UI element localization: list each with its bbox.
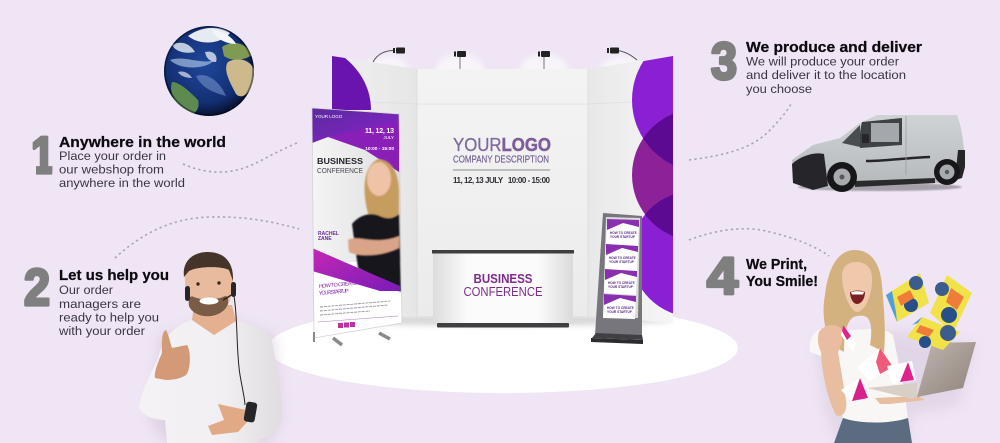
step 1 text: Place your order in — [59, 149, 166, 163]
step 4 text: You Smile! — [746, 273, 818, 290]
right panel circles — [632, 56, 673, 314]
step 3 text: 3 — [711, 33, 737, 91]
step 3 text: We will produce your order — [746, 54, 899, 68]
banner presenter — [348, 159, 401, 292]
logo on back wall: 11, 12, 13 JULY 10:00 - 15:00 — [453, 176, 551, 185]
step 3 text — [711, 33, 922, 96]
step 2 text: with your order — [58, 324, 145, 338]
roll-up banner: RACHEL — [318, 231, 339, 237]
roll-up banner: CONFERENCE — [317, 166, 363, 175]
logo on back wall: YOURLOGO — [453, 134, 551, 155]
woman's top — [809, 329, 908, 424]
van wheels — [827, 162, 857, 192]
thumbs-up hand — [155, 330, 190, 380]
step 4 text: We Print, — [746, 256, 807, 273]
step 4 text: 4 — [707, 248, 738, 306]
dotted connector 3 — [689, 104, 791, 160]
step 4 text — [707, 248, 818, 306]
roll-up banner: 10:00 - 15:00 — [365, 146, 394, 152]
brochure stand — [591, 213, 643, 344]
left panel graphic — [332, 56, 371, 110]
step 3 text: you choose — [746, 82, 812, 96]
van body — [792, 115, 965, 189]
roll-up banner: 11, 12, 13 — [365, 128, 394, 135]
roll-up banner: YOUR STARTUP — [319, 288, 349, 297]
step 2 text: 2 — [24, 259, 50, 317]
step 2 text: Let us help you — [59, 267, 169, 284]
banner feet — [333, 333, 390, 345]
step 2 text: ready to help you — [59, 310, 159, 324]
woman's face and arms — [842, 262, 872, 312]
logo on back wall — [453, 134, 551, 185]
roll-up banner: ZANE — [318, 236, 332, 242]
delivery van — [792, 115, 965, 192]
brochures: HOW TO CREATE — [607, 306, 634, 310]
step 1 text: our webshop from — [59, 162, 164, 176]
step 3 text: and deliver it to the location — [746, 68, 906, 82]
step 1 text — [32, 136, 225, 190]
man with headset — [139, 252, 282, 443]
open hand and watch — [208, 404, 249, 435]
van front bumper — [792, 153, 828, 190]
white floor ellipse — [268, 303, 738, 393]
step 1 text: Anywhere in the world — [59, 134, 226, 151]
wall panels — [333, 314, 673, 326]
logo on back wall: COMPANY DESCRIPTION — [453, 154, 549, 166]
roll-up banner — [312, 108, 402, 346]
dotted connector 4 — [689, 229, 829, 256]
exhibition booth — [314, 48, 673, 344]
brochures: YOUR STARTUP — [608, 285, 634, 289]
dotted connector 1 — [183, 142, 299, 172]
roll-up banner: BUSINESS — [317, 156, 363, 166]
brochures: YOUR STARTUP — [609, 260, 635, 264]
flying flyers — [886, 273, 972, 350]
van side trim — [866, 157, 930, 161]
brochures: HOW TO CREATE — [608, 281, 635, 285]
reception counter — [432, 250, 574, 328]
reception counter: CONFERENCE — [464, 285, 542, 299]
reception counter: BUSINESS — [474, 272, 532, 286]
brochures: HOW TO CREATE — [609, 256, 636, 260]
man's neck and head — [192, 305, 236, 335]
brochures: YOUR STARTUP — [610, 235, 636, 239]
flying cards — [841, 325, 916, 401]
icon: globe — [164, 26, 255, 116]
dotted connector 2 — [115, 217, 299, 258]
roll-up banner: YOUR LOGO — [315, 114, 343, 119]
step 1 text: 1 — [31, 127, 55, 185]
ceiling lights — [365, 48, 644, 86]
brochures — [603, 219, 639, 319]
laptop — [867, 342, 976, 399]
step 2 text: Our order — [59, 283, 113, 297]
step 2 text — [24, 259, 169, 338]
roll-up banner: JULY — [383, 135, 394, 140]
man's shirt — [139, 320, 281, 443]
step 2 text: managers are — [59, 297, 141, 311]
step 3 text: We produce and deliver — [746, 39, 922, 56]
brochures: YOUR STARTUP — [607, 310, 633, 314]
woman with laptop — [809, 250, 976, 443]
roll-up banner: HOW TO CREATE — [319, 281, 357, 290]
van windows — [860, 118, 902, 148]
woman's jeans — [834, 418, 912, 443]
woman's hair — [824, 250, 885, 352]
step 1 text: anywhere in the world — [59, 176, 185, 190]
brochures: HOW TO CREATE — [610, 231, 637, 235]
headset — [185, 286, 190, 301]
